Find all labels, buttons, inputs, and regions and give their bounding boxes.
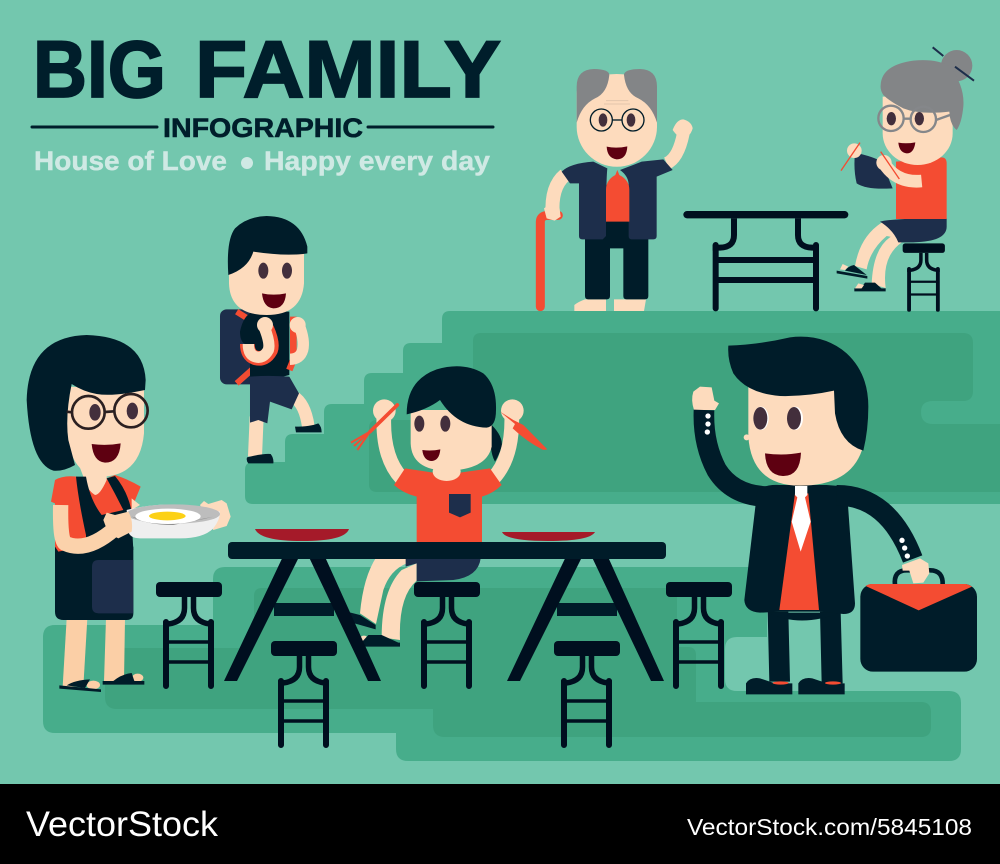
skirt	[880, 218, 947, 242]
far arm	[290, 325, 303, 359]
briefcase flap	[866, 584, 972, 610]
heading: big: BIG	[33, 25, 166, 115]
upper stair platform	[245, 311, 1000, 504]
hair	[407, 366, 496, 428]
tagline left: House of Love	[34, 146, 227, 176]
head	[577, 74, 657, 167]
stool	[903, 243, 945, 310]
briefcase	[860, 584, 977, 672]
shirt	[779, 493, 819, 610]
hair sticks	[933, 47, 974, 81]
tie	[792, 486, 811, 552]
knitting fabric	[854, 153, 893, 189]
backpack	[220, 309, 257, 384]
hair	[27, 335, 146, 471]
shoes	[746, 678, 792, 694]
pocket	[449, 494, 471, 517]
jacket	[744, 485, 855, 614]
girl at table with fork and knife	[347, 366, 547, 647]
eyes	[599, 113, 607, 127]
mouth	[92, 443, 121, 463]
shirt	[606, 170, 629, 222]
fork	[351, 405, 397, 450]
pocket	[92, 560, 133, 613]
fried egg	[135, 509, 201, 524]
ponytail	[491, 425, 502, 462]
hair	[728, 337, 868, 451]
gray hair	[577, 69, 657, 123]
pan	[127, 505, 220, 538]
hands and arm	[847, 143, 862, 158]
shirt	[896, 157, 947, 219]
sandals	[837, 271, 867, 279]
glasses	[67, 394, 148, 429]
eyes	[753, 407, 769, 430]
shorts	[406, 558, 481, 581]
sandals	[59, 685, 101, 692]
cuff buttons	[705, 413, 910, 559]
shirt	[394, 468, 502, 547]
mouth	[898, 142, 915, 153]
table legs	[224, 548, 664, 681]
grandparents table	[683, 211, 848, 308]
heading: family: FAMILY	[195, 25, 501, 115]
head	[748, 387, 862, 486]
glasses	[878, 106, 950, 132]
hair	[228, 216, 307, 275]
eyes	[89, 404, 101, 421]
crossbars	[274, 603, 617, 616]
hands	[373, 399, 396, 422]
glasses	[590, 109, 644, 131]
plate right	[502, 532, 595, 541]
businessman with briefcase	[692, 337, 977, 694]
eyes	[887, 112, 896, 125]
plate left	[255, 529, 349, 541]
mouth	[765, 453, 801, 476]
stools	[156, 582, 732, 745]
pants	[585, 220, 648, 299]
lower floor platform	[43, 567, 961, 761]
right strap	[289, 317, 293, 370]
right arm and hand	[667, 133, 683, 163]
lowered arm	[837, 495, 913, 559]
shorts	[250, 376, 299, 423]
near arm and hand	[61, 505, 115, 546]
legs	[768, 612, 843, 683]
knitting needles	[841, 143, 899, 179]
grandmother knitting	[837, 47, 974, 310]
legs	[255, 417, 257, 457]
hand on cane	[544, 204, 561, 221]
grandfather with cane	[540, 69, 693, 311]
raised arm	[704, 410, 770, 497]
wrinkles	[604, 101, 630, 104]
hand on handle	[902, 558, 929, 583]
mouth	[262, 293, 286, 308]
neck	[78, 463, 107, 495]
title	[32, 25, 501, 176]
knife	[500, 412, 547, 450]
eyes	[258, 263, 268, 279]
bun and hair	[941, 50, 972, 81]
table top	[228, 542, 666, 559]
mouth	[607, 146, 627, 159]
head	[229, 250, 304, 315]
tagline right: Happy every day	[264, 146, 490, 176]
legs	[63, 618, 87, 687]
apron	[76, 476, 133, 550]
sandals	[347, 612, 376, 629]
red straps	[237, 312, 267, 383]
feet	[574, 299, 646, 311]
footer brand: VectorStock	[26, 805, 219, 844]
left arm	[552, 175, 565, 215]
head	[411, 410, 492, 471]
mother with fried egg plate	[27, 335, 231, 692]
raised hand	[692, 387, 719, 410]
eyes	[414, 416, 424, 432]
mouth	[422, 449, 440, 461]
cane	[540, 215, 558, 307]
skirt	[55, 547, 133, 620]
footer bar	[0, 784, 1000, 864]
arms	[384, 413, 512, 478]
long dining table	[224, 529, 666, 681]
boy with backpack	[220, 216, 322, 463]
toes	[87, 681, 100, 689]
near arm	[247, 328, 271, 358]
shirt	[51, 475, 141, 552]
far hand	[200, 500, 231, 530]
vest	[562, 162, 607, 239]
shoes	[247, 454, 273, 463]
legs	[855, 223, 898, 269]
briefcase handle	[895, 570, 943, 585]
torso	[240, 312, 289, 385]
legs	[360, 557, 407, 624]
trouser seat	[768, 613, 841, 620]
subheading: infographic: INFOGRAPHIC	[163, 113, 363, 143]
footer url: VectorStock.com/5845108	[687, 814, 972, 840]
head	[67, 387, 144, 477]
head	[883, 97, 953, 165]
